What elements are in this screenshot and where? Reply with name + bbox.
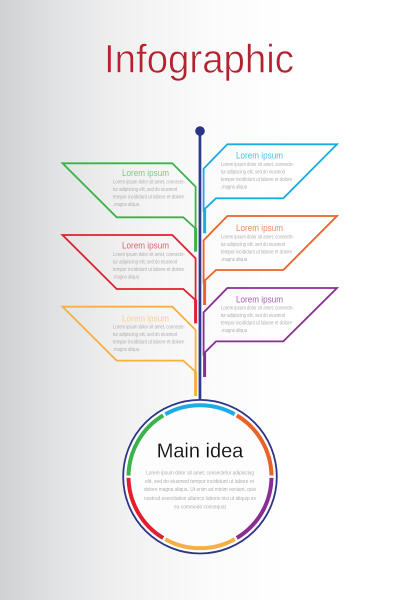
panel: red: Lorem ipsum: [122, 240, 169, 250]
panel: green: Lorem ipsum dolor sit amet, connecte-: [113, 180, 185, 186]
panel: green: Lorem ipsum: [122, 168, 169, 178]
main idea body: ea commodo consequat: [174, 504, 226, 510]
panel: blue: .magna aliqua: [221, 184, 247, 190]
main idea body: elit, sed do eiusmod tempor incididunt ut labore et: [145, 479, 254, 485]
main idea body: nostrud exercitation ullamco laboris nisi ut aliquip ex: [144, 496, 256, 502]
panel: yellow: Lorem ipsum: [122, 314, 169, 324]
panel: yellow: [62, 307, 196, 396]
main idea body: [144, 470, 256, 510]
panel: orange: [204, 216, 337, 305]
title: Infographic: [104, 38, 294, 82]
panel: blue: tempor incididunt ut labore et dolore: [221, 177, 292, 183]
panel: yellow: tur adipiscing elit, sed do eiusmod: [113, 332, 177, 338]
panel: purple: tempor incididunt ut labore et dolore: [221, 320, 292, 326]
panel: red: tur adipiscing elit, sed do eiusmod: [113, 260, 177, 266]
panel: green: [62, 163, 196, 252]
panel: blue: Lorem ipsum: [236, 150, 283, 160]
main idea heading: Main idea: [157, 441, 244, 463]
panel: red: [62, 235, 196, 323]
panel: blue: tur adipiscing elit, sed do eiusmod: [221, 170, 285, 176]
panel: red: Lorem ipsum dolor sit amet, connecte-: [113, 252, 185, 258]
main idea circle: [123, 400, 277, 554]
panel: green: tur adipiscing elit, sed do eiusmod: [113, 187, 177, 193]
panel: blue: [204, 144, 337, 233]
panel: orange: .magna aliqua: [221, 257, 247, 263]
panel: yellow: Lorem ipsum dolor sit amet, connecte-: [113, 324, 185, 330]
ring segments: [128, 405, 272, 548]
panel: purple: Lorem ipsum: [236, 294, 283, 304]
panel: green: .magna aliqua: [113, 202, 139, 208]
main idea body: Lorem ipsum dolor sit amet, consectetur adipiscing: [146, 470, 254, 476]
panel: orange: Lorem ipsum: [236, 223, 283, 233]
panel: purple: tur adipiscing elit, sed do eiusmod: [221, 313, 285, 319]
panel: red: tempor incididunt ut labore et dolore: [113, 267, 184, 273]
panel: purple: .magna aliqua: [221, 328, 247, 334]
panel: yellow: .magna aliqua: [113, 347, 139, 353]
panel: yellow: tempor incididunt ut labore et dolore: [113, 340, 184, 346]
panel: red: .magna aliqua: [113, 274, 139, 280]
panel: purple: [204, 288, 337, 377]
panel: green: tempor incididunt ut labore et dolore: [113, 194, 184, 200]
panel: orange: Lorem ipsum dolor sit amet, connecte-: [221, 234, 294, 240]
panel: blue: Lorem ipsum dolor sit amet, connecte-: [221, 162, 294, 168]
panel: orange: tur adipiscing elit, sed do eiusmod: [221, 242, 285, 248]
panel: orange: tempor incididunt ut labore et dolore: [221, 249, 292, 255]
main idea body: dolore magna aliqua. Ut enim ad minim veniam, quis: [144, 487, 256, 493]
central stem: [195, 126, 205, 401]
panel: purple: Lorem ipsum dolor sit amet, connecte-: [221, 305, 294, 311]
